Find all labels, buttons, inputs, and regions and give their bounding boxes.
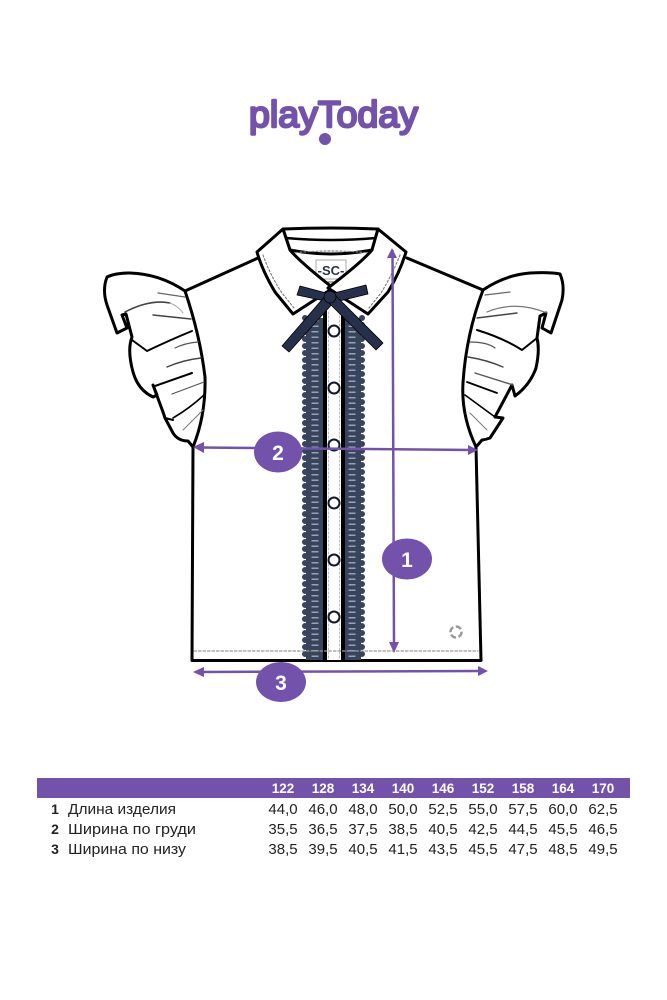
table header bar: 128 — [312, 781, 335, 796]
lace left — [305, 318, 325, 660]
table header bar: 122 — [272, 781, 294, 796]
measurement arrow 1: length: 1 — [401, 549, 413, 572]
lace right — [343, 318, 362, 660]
table header bar: 152 — [472, 781, 494, 796]
back neck — [283, 228, 378, 254]
measurement arrow 1: length — [382, 248, 432, 653]
row 3: hem width — [51, 841, 618, 858]
right sleeve — [476, 273, 563, 447]
table header bar: 140 — [392, 781, 414, 796]
row 1: length: 1 — [51, 801, 59, 817]
row 2: chest width: 44,5 — [508, 821, 538, 838]
logo: playToday: playToday — [249, 94, 419, 135]
row 1: length: 55,0 — [468, 801, 498, 818]
buttons — [328, 326, 340, 622]
small brand logo — [450, 626, 462, 638]
row 2: chest width: 45,5 — [548, 821, 578, 838]
row 2: chest width: 37,5 — [348, 821, 378, 838]
table header bar — [37, 778, 630, 798]
right collar — [328, 229, 406, 314]
left collar — [257, 229, 333, 314]
bow — [282, 285, 383, 352]
row 1: length: 62,5 — [588, 801, 618, 818]
row 2: chest width: 46,5 — [588, 821, 618, 838]
row 3: hem width: 47,5 — [508, 841, 538, 858]
placket — [325, 308, 343, 660]
row 3: hem width: 41,5 — [388, 841, 418, 858]
body outline — [185, 258, 483, 660]
row 1: length: 48,0 — [348, 801, 378, 818]
table header bar: 164 — [552, 781, 575, 796]
measurement arrow 3: hem width — [193, 662, 488, 702]
row 1: length: 46,0 — [308, 801, 338, 818]
table header bar: 170 — [592, 781, 614, 796]
row 1: length: 60,0 — [548, 801, 578, 818]
left sleeve folds — [125, 293, 204, 430]
row 2: chest width: 38,5 — [388, 821, 418, 838]
row 3: hem width: 39,5 — [308, 841, 338, 858]
row 1: length: Длина изделия — [68, 801, 176, 818]
table header bar: 158 — [512, 781, 535, 796]
row 2: chest width — [51, 821, 618, 838]
measurement arrow 2: chest width — [193, 432, 478, 472]
row 3: hem width: Ширина по низу — [68, 841, 187, 858]
left sleeve — [104, 273, 193, 447]
table header bar: 134 — [352, 781, 375, 796]
row 3: hem width: 48,5 — [548, 841, 578, 858]
neck tag — [316, 260, 346, 282]
row 3: hem width: 38,5 — [268, 841, 298, 858]
measurement arrow 3: hem width: 3 — [275, 672, 287, 695]
row 2: chest width: Ширина по груди — [68, 821, 196, 838]
row 3: hem width: 49,5 — [588, 841, 618, 858]
row 1: length: 57,5 — [508, 801, 538, 818]
row 3: hem width: 40,5 — [348, 841, 378, 858]
row 2: chest width: 40,5 — [428, 821, 458, 838]
row 2: chest width: 35,5 — [268, 821, 298, 838]
row 3: hem width: 3 — [51, 841, 59, 857]
table header bar: 146 — [432, 781, 455, 796]
measurement arrow 2: chest width: 2 — [272, 442, 284, 465]
row 3: hem width: 45,5 — [468, 841, 498, 858]
right sleeve folds — [465, 292, 547, 430]
row 2: chest width: 42,5 — [468, 821, 498, 838]
row 1: length: 52,5 — [428, 801, 458, 818]
row 2: chest width: 36,5 — [308, 821, 338, 838]
hem stitching — [194, 650, 478, 652]
garment: shirt technical drawing — [104, 228, 563, 660]
neck tag: -SC- — [318, 263, 344, 278]
row 2: chest width: 2 — [51, 821, 59, 837]
row 1: length: 50,0 — [388, 801, 418, 818]
row 1: length: 44,0 — [268, 801, 298, 818]
row 1: length — [51, 801, 618, 818]
size table — [37, 778, 630, 858]
row 3: hem width: 43,5 — [428, 841, 458, 858]
